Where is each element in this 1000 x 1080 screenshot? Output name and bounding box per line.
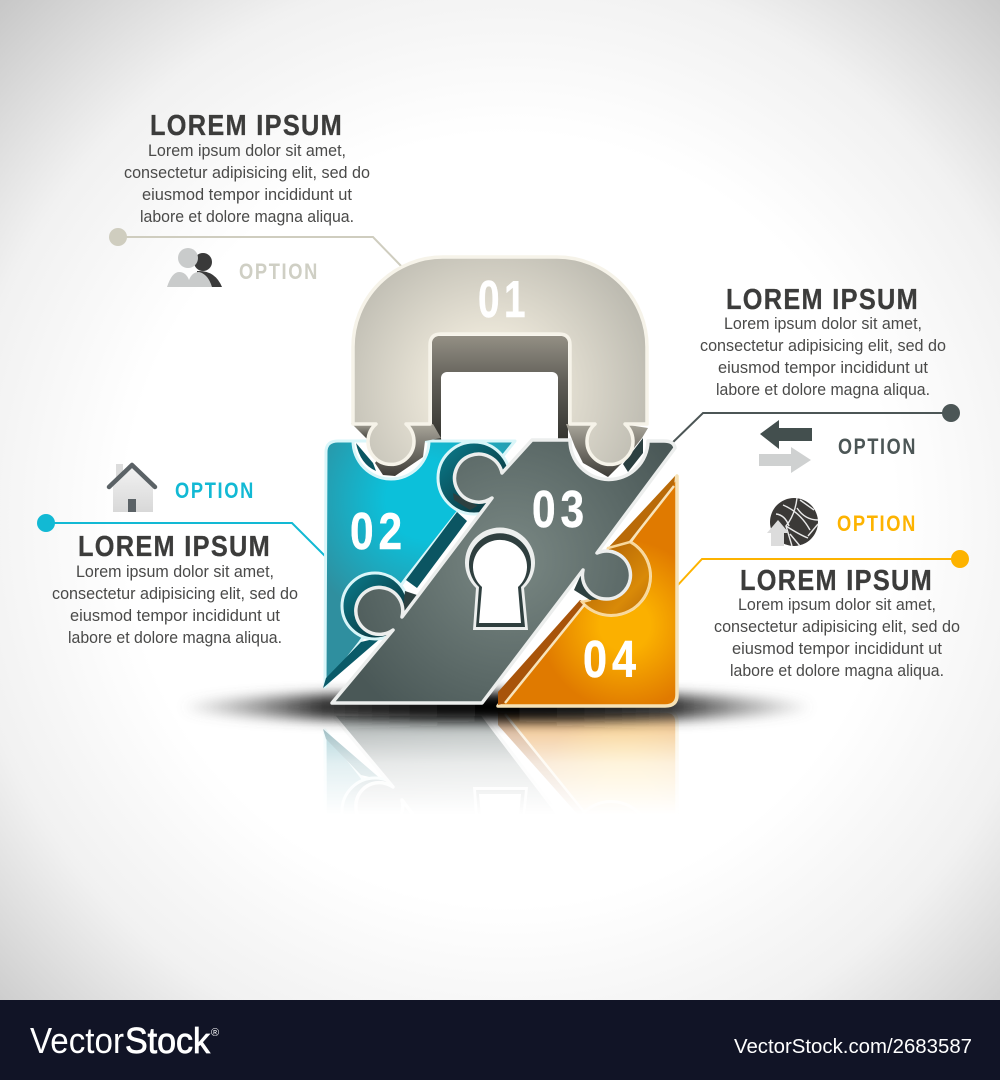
piece 04: orange: [498, 476, 677, 706]
keyhole: [465, 528, 535, 630]
number 03: 03: [532, 481, 589, 539]
band: orange bevel upper: [608, 476, 675, 548]
text block 03: Lorem ipsum dolor sit amet,: [724, 314, 922, 333]
number 02: 02: [350, 503, 407, 561]
text block 03: labore et dolore magna aliqua.: [716, 380, 930, 399]
number 04: 04: [583, 631, 641, 689]
connector: 03: [668, 404, 960, 447]
text block 04: Lorem ipsum dolor sit amet,: [738, 595, 936, 614]
option label 01: OPTION: [239, 259, 319, 284]
text block 01: [124, 110, 370, 226]
text block 02: labore et dolore magna aliqua.: [68, 628, 282, 647]
shackle inner dark window: [432, 336, 568, 444]
text block 01: eiusmod tempor incididunt ut: [142, 185, 352, 204]
connector: 01: [109, 228, 404, 269]
text block 01: consectetur adipisicing elit, sed do: [124, 163, 370, 182]
text block 03: consectetur adipisicing elit, sed do: [700, 336, 946, 355]
footer band: [0, 1000, 1000, 1080]
socket: top left: [353, 441, 429, 479]
ground shadow: [185, 692, 809, 722]
text block 02: [52, 531, 298, 647]
shackle 01: [353, 257, 647, 464]
icon: house: [109, 464, 155, 512]
text block 03: eiusmod tempor incididunt ut: [718, 358, 928, 377]
band: teal bevel: [406, 512, 467, 588]
option label 03: OPTION: [838, 434, 917, 459]
text block 03: [700, 284, 946, 399]
icon: people: [167, 248, 222, 287]
socket: orange: [582, 542, 650, 615]
connector: 04: [664, 550, 969, 600]
piece 03: gray: [332, 440, 675, 703]
text block 02: LOREM IPSUM: [78, 531, 271, 563]
text block 01: LOREM IPSUM: [150, 110, 343, 142]
band: orange bevel lower: [498, 600, 586, 705]
footer logo: Stock: [125, 1020, 211, 1061]
text block 04: LOREM IPSUM: [740, 565, 933, 597]
socket: centre: [438, 442, 510, 514]
text block 03: LOREM IPSUM: [726, 284, 919, 316]
icon: globe network: [767, 498, 818, 546]
padlock body: [323, 440, 677, 706]
text block 01: Lorem ipsum dolor sit amet,: [148, 141, 346, 160]
icon: arrows: [759, 420, 812, 473]
footer logo: [30, 1020, 219, 1061]
pale inner lines: [505, 486, 674, 703]
option label 04: OPTION: [837, 511, 917, 536]
text block 02: Lorem ipsum dolor sit amet,: [76, 562, 274, 581]
text block 01: labore et dolore magna aliqua.: [140, 207, 354, 226]
footer logo: ®: [211, 1027, 219, 1039]
piece 02: cyan: [323, 441, 515, 688]
text block 02: consectetur adipisicing elit, sed do: [52, 584, 298, 603]
lock reflection: [323, 712, 679, 802]
footer url: VectorStock.com/2683587: [734, 1036, 972, 1058]
connector: 02: [37, 514, 327, 558]
text block 04: consectetur adipisicing elit, sed do: [714, 617, 960, 636]
footer logo: Vector: [30, 1020, 124, 1061]
text block 04: labore et dolore magna aliqua.: [730, 661, 944, 680]
knob shadows: [402, 493, 607, 617]
shackle depth shading: [351, 423, 648, 477]
text block 04: [714, 565, 960, 680]
socket: lower left: [342, 573, 408, 639]
text block 02: eiusmod tempor incididunt ut: [70, 606, 280, 625]
text block 04: eiusmod tempor incididunt ut: [732, 639, 942, 658]
option label 02: OPTION: [175, 478, 255, 503]
number 01: 01: [478, 271, 530, 329]
